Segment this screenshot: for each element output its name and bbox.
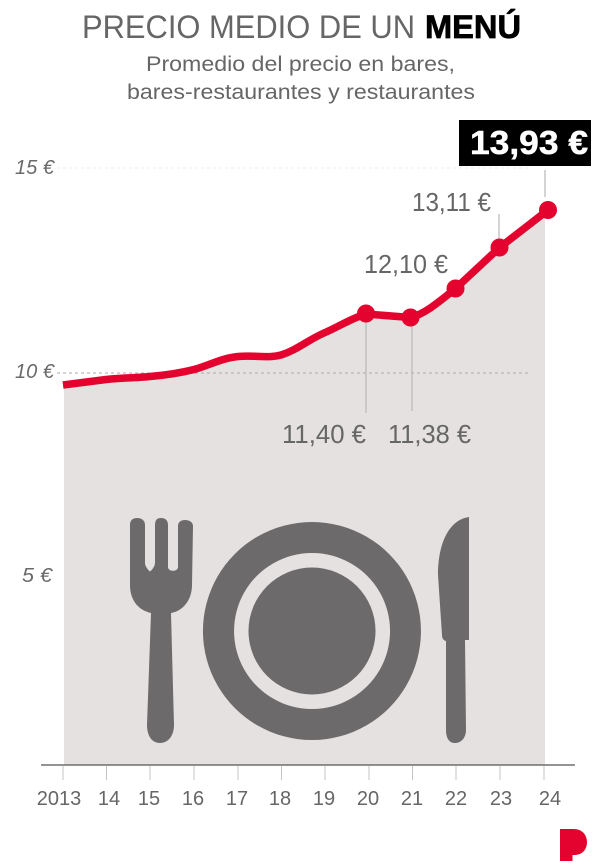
x axis labels — [37, 788, 561, 810]
y axis labels: 10 € — [15, 361, 55, 383]
gridline 10 — [57, 372, 528, 374]
subtitle: bares-restaurantes y restaurantes — [127, 81, 475, 104]
y axis labels: 15 € — [15, 157, 55, 179]
value labels — [282, 187, 491, 449]
price line — [63, 210, 548, 385]
x axis labels: 15 — [138, 788, 160, 810]
callout: latest price: 13,93 € — [470, 124, 588, 161]
logo — [560, 829, 587, 861]
x axis labels: 2013 — [37, 788, 81, 810]
x axis labels: 24 — [539, 788, 561, 810]
x axis labels: 19 — [313, 788, 335, 810]
title: PRECIO MEDIO DE UN — [82, 9, 415, 45]
icon: fork — [130, 518, 193, 743]
title: MENÚ — [425, 9, 521, 45]
x axis labels: 20 — [357, 788, 379, 810]
leader lines — [366, 170, 545, 413]
icon: knife — [438, 517, 469, 743]
y axis labels — [15, 157, 55, 587]
value labels: 11,40 € — [282, 419, 367, 449]
subtitle — [127, 53, 475, 104]
value labels: 11,38 € — [388, 419, 472, 449]
y axis labels: 5 € — [22, 565, 53, 587]
callout: latest price — [459, 120, 591, 166]
x axis labels: 23 — [490, 788, 512, 810]
area under the line — [64, 212, 545, 765]
x axis labels: 16 — [182, 788, 204, 810]
x axis labels: 18 — [269, 788, 291, 810]
icon: plate — [203, 522, 421, 740]
x axis — [41, 765, 575, 780]
x axis labels: 17 — [226, 788, 248, 810]
gridline 15 — [57, 167, 530, 169]
subtitle: Promedio del precio en bares, — [146, 53, 455, 76]
x axis labels: 21 — [401, 788, 423, 810]
data points — [357, 201, 557, 326]
icon: plate centre — [248, 568, 376, 694]
x axis labels: 22 — [445, 788, 467, 810]
value labels: 12,10 € — [364, 249, 449, 279]
value labels: 13,11 € — [412, 187, 491, 217]
x axis labels: 14 — [98, 788, 120, 810]
